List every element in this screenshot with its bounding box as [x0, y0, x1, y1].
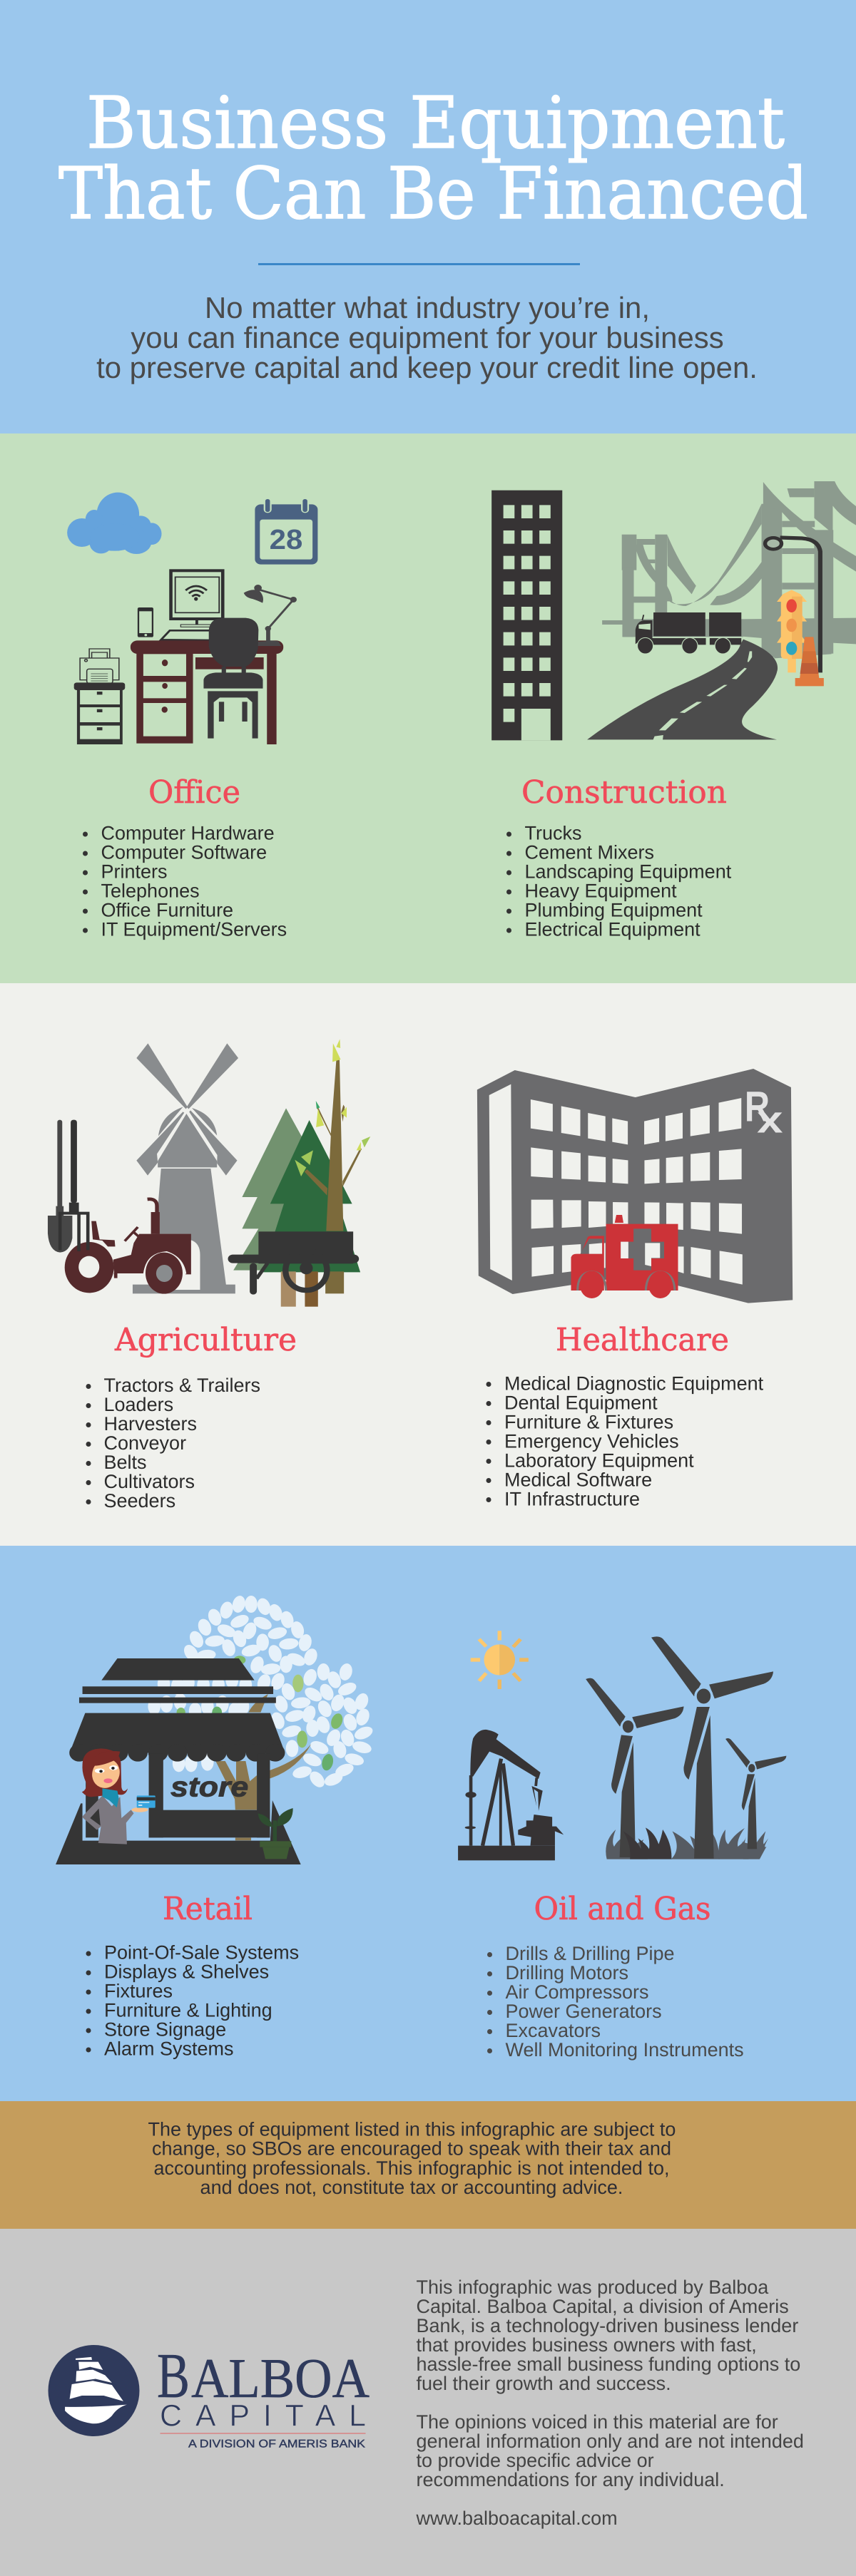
icon: woman with credit card	[82, 1748, 156, 1844]
icon: store	[56, 1658, 301, 1864]
about text: hassle-free small business funding options to	[417, 2354, 800, 2375]
heading: healthcare: Healthcare	[556, 1322, 729, 1358]
list: agriculture: Harvesters	[104, 1413, 197, 1435]
list: retail: Store Signage	[104, 2019, 226, 2041]
list: construction	[506, 823, 732, 940]
list: agriculture: Cultivators	[104, 1471, 195, 1492]
subtitle text: you can finance equipment for your business	[131, 321, 724, 354]
list: oil and gas: Air Compressors	[505, 1981, 649, 2003]
disclaimer text	[148, 2119, 676, 2198]
list: retail: Fixtures	[104, 1981, 173, 2002]
icon: oil pump jack	[458, 1730, 564, 1860]
disclaimer text: and does not, constitute tax or accounting advice.	[200, 2177, 623, 2198]
heading: retail: Retail	[163, 1891, 253, 1927]
list: retail: Displays & Shelves	[104, 1961, 269, 1982]
title	[58, 81, 808, 235]
list: healthcare: Medical Diagnostic Equipment	[504, 1373, 764, 1395]
subtitle text: No matter what industry you’re in,	[205, 291, 650, 324]
subtitle text	[96, 291, 758, 384]
list: oil and gas	[487, 1943, 744, 2061]
panel: footer	[0, 2229, 856, 2576]
list: retail	[86, 1942, 299, 2059]
illustration: office	[67, 493, 317, 744]
icon: cart	[228, 1231, 359, 1295]
about text: to provide specific advice or	[417, 2450, 654, 2471]
list: healthcare: Furniture & Fixtures	[504, 1412, 673, 1433]
panel: retail and oil and gas	[0, 1546, 856, 2101]
icon: lamp	[244, 585, 297, 646]
about text: The opinions voiced in this material are for	[417, 2411, 778, 2433]
icon: street lamp	[765, 538, 820, 672]
icon: grass	[606, 1828, 768, 1859]
icon: trees	[233, 1039, 370, 1307]
illustration: oil and gas	[458, 1631, 786, 1860]
list: oil and gas: Power Generators	[505, 2001, 662, 2022]
list: agriculture: Tractors & Trailers	[104, 1375, 260, 1396]
list: agriculture	[86, 1375, 260, 1512]
panel: header	[0, 0, 856, 433]
icon: printer	[80, 649, 119, 683]
Rx sign: x	[757, 1098, 783, 1141]
illustration: construction	[491, 481, 856, 740]
list: office: Printers	[101, 861, 168, 883]
icon: building	[491, 491, 562, 740]
list: agriculture: Belts	[104, 1452, 147, 1473]
list: retail: Point-Of-Sale Systems	[104, 1942, 299, 1964]
icon: calendar: 28	[270, 524, 302, 555]
list: office: Office Furniture	[101, 900, 233, 921]
icon: tree	[148, 1595, 375, 1840]
title: Business Equipment	[86, 81, 785, 165]
list: construction: Trucks	[525, 823, 582, 844]
list: healthcare: IT Infrastructure	[504, 1489, 640, 1510]
list: healthcare: Medical Software	[504, 1469, 652, 1490]
list: office: Computer Software	[101, 841, 267, 863]
about text: fuel their growth and success.	[417, 2373, 671, 2394]
icon: monitor	[161, 570, 234, 640]
title: That Can Be Financed	[58, 152, 808, 235]
about text: that provides business owners with fast,	[417, 2334, 757, 2356]
list: construction: Cement Mixers	[525, 841, 654, 863]
panel: disclaimer	[0, 2101, 856, 2229]
about text: recommendations for any individual.	[417, 2469, 725, 2490]
icon: traffic light	[777, 590, 807, 672]
icon: truck	[636, 612, 741, 654]
list: oil and gas: Well Monitoring Instruments	[505, 2039, 744, 2061]
logo wordmark: A DIVISION OF AMERIS BANK	[188, 2438, 366, 2450]
heading: office: Office	[148, 774, 240, 811]
icon: spade and fork	[48, 1120, 88, 1253]
icon: calendar	[255, 498, 317, 565]
list: healthcare: Laboratory Equipment	[504, 1450, 694, 1472]
list: office: Telephones	[101, 880, 200, 901]
about text: Capital. Balboa Capital, a division of Ameris	[417, 2296, 789, 2317]
about text: Bank, is a technology-driven business lender	[417, 2315, 798, 2336]
list: healthcare: Emergency Vehicles	[504, 1430, 679, 1452]
disclaimer text: accounting professionals. This infographic is not intended to,	[154, 2157, 669, 2179]
Rx sign: R	[745, 1083, 770, 1131]
about text: general information only and are not intended	[417, 2431, 804, 2452]
icon: office chair	[203, 618, 263, 739]
list: agriculture: Conveyor	[104, 1432, 186, 1454]
illustration: agriculture	[48, 1039, 370, 1307]
icon: desk	[131, 640, 283, 744]
icon: phone	[138, 607, 153, 637]
list: oil and gas: Drilling Motors	[505, 1962, 628, 1984]
icon: ambulance	[571, 1215, 678, 1298]
list: oil and gas: Excavators	[505, 2020, 601, 2041]
icon: store: store	[170, 1771, 248, 1802]
list: office: IT Equipment/Servers	[101, 918, 287, 940]
icon: cloud	[67, 493, 162, 554]
logo wordmark: CAPITAL	[160, 2398, 366, 2433]
icon: potted plant	[258, 1808, 293, 1859]
heading: oil and gas: Oil and Gas	[534, 1891, 710, 1927]
list: healthcare	[486, 1373, 764, 1510]
logo wordmark: ALBOA	[191, 2348, 370, 2410]
icon: ship emblem	[49, 2345, 140, 2436]
icon: hospital building	[477, 1069, 793, 1303]
list: healthcare: Dental Equipment	[504, 1392, 658, 1413]
logo wordmark	[157, 2341, 370, 2450]
illustration: healthcare	[477, 1069, 793, 1303]
illustration: retail	[56, 1595, 375, 1864]
icon: windmill	[133, 1043, 238, 1293]
panel: office and construction	[0, 433, 856, 983]
about text: This infographic was produced by Balboa	[417, 2277, 769, 2298]
about text	[415, 2277, 804, 2529]
list: retail: Furniture & Lighting	[104, 1999, 272, 2021]
list: retail: Alarm Systems	[104, 2038, 234, 2059]
list: office: Computer Hardware	[101, 823, 275, 844]
panel: agriculture and healthcare	[0, 983, 856, 1546]
list: agriculture: Seeders	[104, 1490, 175, 1512]
logo: Balboa Capital	[49, 2341, 370, 2450]
about text: www.balboacapital.com	[415, 2508, 618, 2529]
list: construction: Plumbing Equipment	[525, 900, 703, 921]
subtitle text: to preserve capital and keep your credit line open.	[96, 351, 758, 384]
icon: road	[587, 640, 778, 739]
list: construction: Landscaping Equipment	[525, 861, 732, 883]
list: agriculture: Loaders	[104, 1394, 173, 1415]
icon: tractor	[65, 1199, 191, 1294]
list: oil and gas: Drills & Drilling Pipe	[505, 1943, 675, 1964]
icon: bridge	[602, 481, 856, 658]
icon: sun	[471, 1631, 529, 1689]
list: office	[83, 823, 287, 940]
heading: construction: Construction	[521, 774, 727, 811]
list: construction: Electrical Equipment	[525, 918, 700, 940]
heading: agriculture: Agriculture	[114, 1322, 297, 1358]
icon: dark grass	[623, 1827, 671, 1859]
icon: wind turbines	[586, 1636, 786, 1859]
disclaimer text: The types of equipment listed in this infographic are subject to	[148, 2119, 676, 2140]
icon: traffic cone	[795, 637, 824, 686]
logo wordmark: B	[157, 2341, 190, 2411]
disclaimer text: change, so SBOs are encouraged to speak with their tax and	[152, 2138, 671, 2159]
icon: filing cabinet	[74, 682, 125, 744]
list: construction: Heavy Equipment	[525, 880, 677, 901]
